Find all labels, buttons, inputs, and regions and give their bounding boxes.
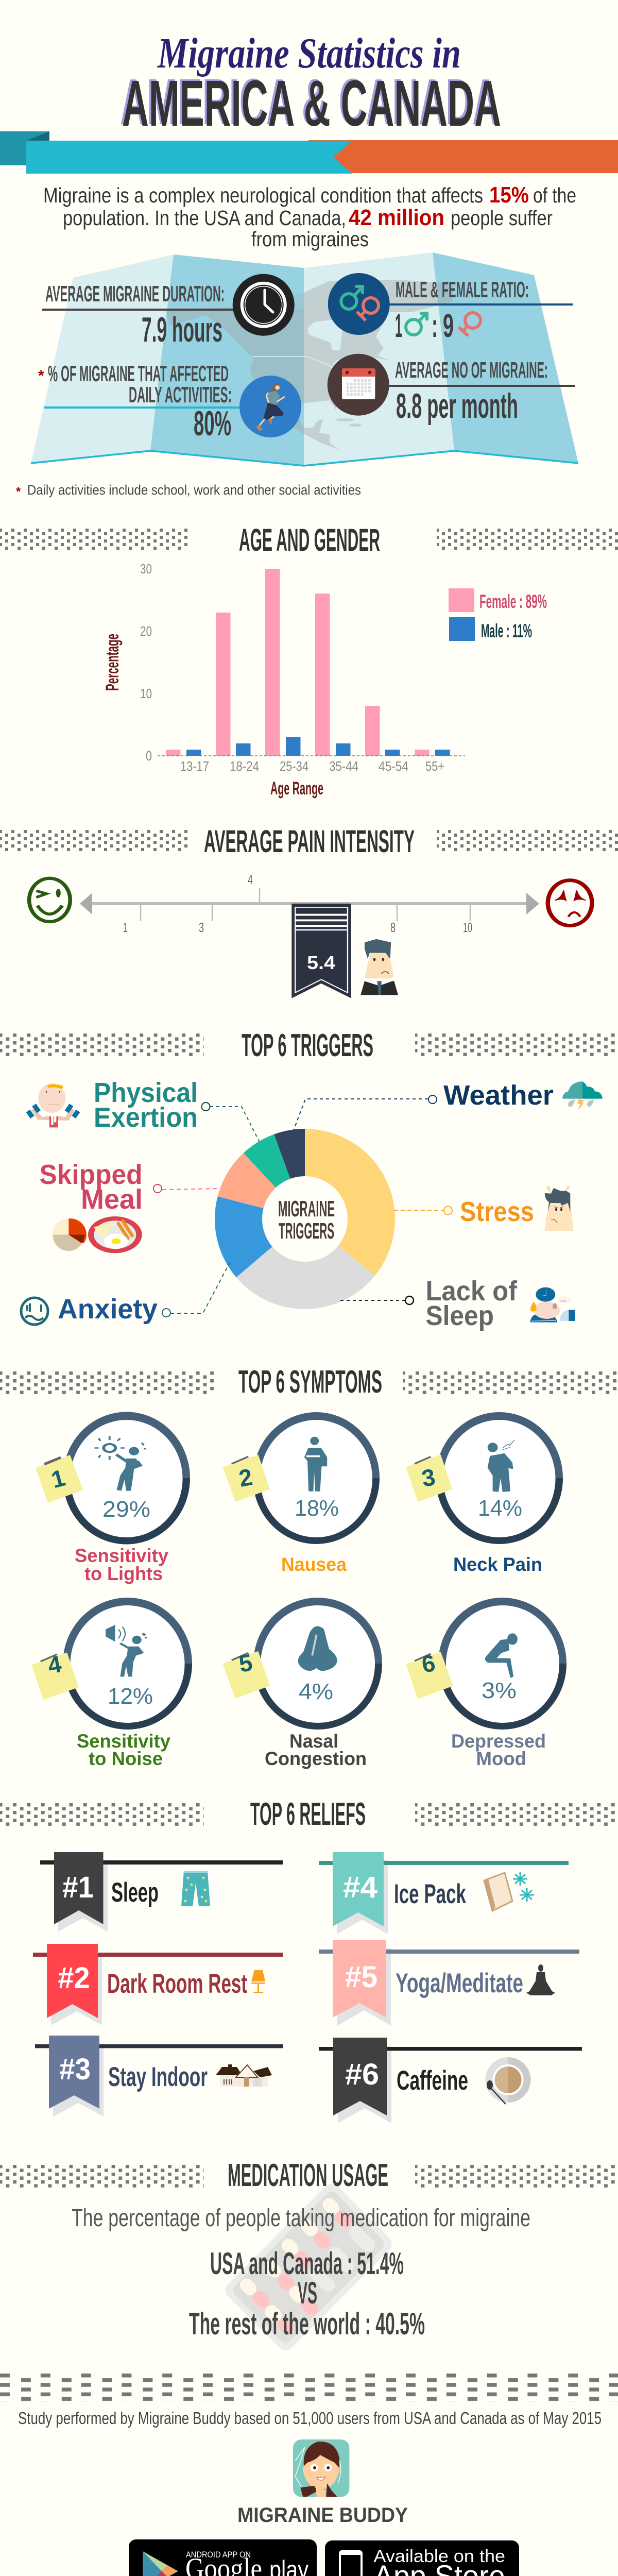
symptom 5: nasal congestion: Congestion bbox=[265, 1748, 367, 1769]
icon: calendar bbox=[328, 354, 389, 416]
symptom 1: sensitivity to lights: to Lights bbox=[84, 1563, 163, 1584]
symptom 4: sensitivity to noise: 12% bbox=[108, 1684, 153, 1709]
icon: lamp bbox=[251, 1970, 265, 1993]
section heading: symptoms: TOP 6 SYMPTOMS bbox=[238, 1364, 382, 1400]
button: app store: Available on the bbox=[374, 2547, 505, 2566]
bar chart: 45-54 bbox=[379, 758, 408, 774]
icon: happy face bbox=[29, 878, 70, 922]
relief 1: sleep bbox=[40, 1852, 283, 1931]
symptom 1: sensitivity to lights bbox=[36, 1412, 190, 1584]
stat: average duration: 7.9 hours bbox=[142, 310, 222, 349]
label: anxiety: Anxiety bbox=[58, 1294, 158, 1325]
pain scale arrow: 4 bbox=[248, 872, 253, 887]
section heading: reliefs bbox=[0, 1797, 618, 1832]
bar chart: 20 bbox=[140, 623, 152, 639]
button: google play bbox=[129, 2539, 317, 2576]
stat: daily activities bbox=[38, 361, 241, 443]
relief 1: sleep: Sleep bbox=[111, 1877, 159, 1908]
symptom 5: nasal congestion bbox=[222, 1598, 382, 1769]
bar chart bbox=[102, 561, 465, 799]
label: physical exertion: Exertion bbox=[94, 1102, 198, 1133]
symptom 5: nasal congestion: 4% bbox=[299, 1679, 333, 1704]
label: skipped meal: Skipped bbox=[39, 1159, 142, 1190]
section heading: age and gender bbox=[0, 522, 618, 557]
intro text: people suffer bbox=[451, 206, 553, 230]
icon: clock and plate bbox=[52, 1216, 142, 1253]
map silhouette bbox=[165, 280, 453, 450]
label: lack of sleep: Lack of bbox=[425, 1276, 518, 1307]
stat: daily activities: 80% bbox=[194, 404, 231, 443]
relief 2: dark room rest bbox=[33, 1944, 283, 2025]
bar chart: 0 bbox=[146, 748, 152, 764]
symptom 1: sensitivity to lights: Sensitivity bbox=[75, 1545, 168, 1566]
intro text: 42 million bbox=[349, 205, 444, 230]
symptom 2: nausea: 18% bbox=[295, 1496, 339, 1521]
score ribbon bbox=[291, 904, 351, 998]
footnote: Daily activities include school, work and other social activities bbox=[27, 482, 361, 498]
sticky note 4 bbox=[31, 1652, 79, 1700]
brand name: MIGRAINE BUDDY bbox=[237, 2504, 408, 2527]
intro text: 15% bbox=[489, 182, 529, 208]
symptom 1: sensitivity to lights: 29% bbox=[102, 1497, 150, 1522]
symptom 6: depressed mood: 3% bbox=[482, 1678, 517, 1703]
medication comparison bbox=[189, 2246, 425, 2341]
section heading: medication bbox=[0, 2158, 618, 2193]
label: skipped meal bbox=[39, 1159, 143, 1215]
intro text bbox=[43, 182, 576, 251]
relief 2: dark room rest: Dark Room Rest bbox=[107, 1969, 247, 1999]
stat: gender ratio bbox=[388, 277, 573, 344]
connector: physical exertion bbox=[202, 1103, 260, 1142]
stat: average duration: AVERAGE MIGRAINE DURATION: bbox=[45, 281, 225, 307]
sticky note 3 bbox=[406, 1454, 453, 1502]
section heading: medication: MEDICATION USAGE bbox=[228, 2158, 388, 2193]
bar chart: 18-24 bbox=[230, 758, 259, 774]
donut chart: TRIGGERS bbox=[279, 1218, 334, 1244]
intro text: population. In the USA and Canada, bbox=[63, 206, 346, 230]
symptom 5: nasal congestion: 5 bbox=[237, 1649, 254, 1677]
sticky note 2 bbox=[222, 1454, 270, 1502]
pain scale arrow: 10 bbox=[463, 920, 472, 935]
relief 3: stay indoor: Stay Indoor bbox=[108, 2062, 208, 2092]
icon: gender symbols bbox=[328, 273, 390, 335]
symptom 2: nausea: 2 bbox=[237, 1463, 254, 1492]
connector: anxiety bbox=[162, 1263, 230, 1317]
icon: pajama pants bbox=[181, 1871, 210, 1906]
icon: muscle man bbox=[26, 1083, 80, 1127]
medication comparison: VS bbox=[298, 2276, 317, 2310]
symptom 2: nausea: Nausea bbox=[281, 1554, 347, 1575]
panel: medication usage bbox=[0, 2158, 618, 2354]
stat: average number bbox=[388, 358, 575, 426]
label: lack of sleep: Sleep bbox=[425, 1300, 494, 1331]
icon: coffee cup bbox=[485, 2057, 530, 2104]
symptom 6: depressed mood: 6 bbox=[420, 1649, 437, 1678]
relief 4: ice pack: Ice Pack bbox=[394, 1879, 466, 1909]
panel: folded map with key stats bbox=[31, 252, 578, 466]
relief 4: ice pack: #4 bbox=[343, 1871, 377, 1904]
connector: lack of sleep bbox=[340, 1296, 414, 1304]
icon: storm cloud bbox=[562, 1081, 603, 1110]
panel: top 6 triggers bbox=[0, 1028, 618, 1331]
stat: daily activities: * bbox=[38, 367, 44, 384]
relief 1: sleep: #1 bbox=[62, 1871, 94, 1904]
connector: skipped meal bbox=[153, 1184, 220, 1193]
relief 6: caffeine: Caffeine bbox=[397, 2065, 468, 2096]
pain scale arrow: 8 bbox=[390, 920, 396, 935]
bar chart: 55+ bbox=[425, 758, 444, 774]
relief 5: yoga bbox=[319, 1940, 579, 2026]
panel: top 6 symptoms bbox=[0, 1364, 618, 1769]
sticky note 1 bbox=[36, 1455, 83, 1503]
label: physical exertion: Physical bbox=[94, 1077, 198, 1108]
icon: sad face bbox=[548, 880, 592, 926]
medication comparison: USA and Canada : 51.4% bbox=[210, 2246, 404, 2281]
icon: house bbox=[216, 2064, 272, 2087]
label: weather: Weather bbox=[443, 1080, 554, 1111]
icon: migraine buddy logo bbox=[293, 2439, 349, 2497]
icon: frowning man bbox=[360, 939, 398, 995]
title bbox=[120, 29, 501, 140]
bar chart: 35-44 bbox=[329, 758, 358, 774]
icon: clock bbox=[233, 274, 295, 336]
icon: ice pack bag bbox=[484, 1872, 534, 1911]
medication comparison: The rest of the world : 40.5% bbox=[189, 2307, 425, 2341]
label: stress: Stress bbox=[460, 1196, 534, 1227]
bar chart: 13-17 bbox=[180, 758, 209, 774]
section heading: triggers: TOP 6 TRIGGERS bbox=[242, 1028, 373, 1063]
symptom 6: depressed mood: Mood bbox=[476, 1748, 526, 1769]
bar chart: Percentage bbox=[102, 634, 123, 691]
label: physical exertion bbox=[94, 1077, 198, 1133]
relief 5: yoga: #5 bbox=[345, 1960, 377, 1994]
symptom 4: sensitivity to noise: to Noise bbox=[89, 1748, 163, 1769]
title: Migraine Statistics in bbox=[157, 29, 461, 77]
bar chart: 10 bbox=[140, 686, 152, 701]
label: lack of sleep bbox=[425, 1276, 518, 1331]
panel: top 6 reliefs bbox=[0, 1797, 618, 2123]
relief 5: yoga: Yoga/Meditate bbox=[396, 1968, 523, 1998]
legend bbox=[449, 588, 547, 641]
symptom 4: sensitivity to noise bbox=[31, 1598, 192, 1769]
connector: weather bbox=[294, 1095, 437, 1130]
section heading: triggers bbox=[0, 1028, 618, 1063]
icon: runner bbox=[239, 376, 301, 437]
relief 6: caffeine bbox=[319, 2038, 582, 2123]
footnote: * bbox=[16, 485, 21, 499]
intro text: of the bbox=[533, 183, 576, 207]
symptom 3: neck pain bbox=[406, 1412, 563, 1575]
section heading: pain intensity: AVERAGE PAIN INTENSITY bbox=[204, 824, 415, 859]
relief 4: ice pack bbox=[319, 1852, 569, 1934]
bar chart: 25-34 bbox=[280, 758, 308, 774]
bar chart: 30 bbox=[140, 561, 152, 577]
icon: sleeping head: z z Z bbox=[560, 1300, 566, 1303]
bar chart: Age Range bbox=[270, 778, 323, 799]
score ribbon: 5.4 bbox=[307, 952, 335, 973]
symptom 4: sensitivity to noise: Sensitivity bbox=[77, 1731, 170, 1752]
stat: gender ratio: 9 bbox=[443, 307, 454, 344]
stat: gender ratio: 1 bbox=[395, 307, 402, 344]
symptom 4: sensitivity to noise: 4 bbox=[46, 1650, 64, 1679]
icon: blister pack watermark bbox=[222, 2180, 396, 2354]
ribbon banner bbox=[0, 131, 618, 174]
icon: meditating figure bbox=[526, 1964, 555, 1995]
panel: age and gender bbox=[0, 522, 618, 799]
donut chart bbox=[215, 1129, 395, 1309]
pain scale arrow bbox=[80, 872, 539, 935]
stat: daily activities: % OF MIGRAINE THAT AFFECTED bbox=[48, 361, 229, 386]
symptom 2: nausea bbox=[222, 1412, 380, 1575]
pain scale arrow: 3 bbox=[199, 920, 204, 935]
intro text: from migraines bbox=[251, 227, 369, 251]
legend: Female : 89% bbox=[479, 591, 547, 612]
relief 3: stay indoor bbox=[35, 2036, 283, 2116]
sticky note 1: 1 bbox=[48, 1464, 68, 1493]
intro text: Migraine is a complex neurological condition that affects bbox=[43, 183, 483, 207]
stat: gender ratio: : bbox=[432, 307, 438, 344]
icon: stressed head bbox=[544, 1185, 574, 1231]
section heading: age and gender: AGE AND GENDER bbox=[239, 522, 380, 557]
sticky note 6 bbox=[406, 1652, 453, 1699]
section heading: reliefs: TOP 6 RELIEFS bbox=[250, 1797, 366, 1832]
symptom 6: depressed mood bbox=[406, 1598, 566, 1769]
label: skipped meal: Meal bbox=[81, 1184, 143, 1215]
relief 3: stay indoor: #3 bbox=[59, 2053, 91, 2086]
section heading: symptoms bbox=[0, 1364, 618, 1400]
stat: daily activities: DAILY ACTIVITIES: bbox=[129, 382, 232, 408]
symptom 3: neck pain: Neck Pain bbox=[453, 1554, 542, 1575]
symptom 3: neck pain: 3 bbox=[420, 1463, 437, 1492]
symptom 6: depressed mood: Depressed bbox=[451, 1731, 546, 1752]
icon: anxious face bbox=[21, 1298, 48, 1325]
sticky note 5 bbox=[222, 1651, 270, 1699]
section heading: pain intensity bbox=[0, 824, 618, 859]
relief 6: caffeine: #6 bbox=[345, 2058, 379, 2091]
icon: sleeping head bbox=[530, 1287, 575, 1323]
button: app store bbox=[325, 2540, 519, 2576]
relief 2: dark room rest: #2 bbox=[58, 1961, 90, 1995]
symptom 3: neck pain: 14% bbox=[478, 1496, 522, 1521]
symptom 5: nasal congestion: Nasal bbox=[289, 1731, 338, 1752]
donut chart: MIGRAINE bbox=[278, 1196, 335, 1222]
connector: stress bbox=[394, 1207, 452, 1215]
panel: average pain intensity bbox=[0, 824, 618, 998]
stat: average duration bbox=[42, 281, 234, 349]
legend: Male : 11% bbox=[481, 620, 532, 641]
pain scale arrow: 1 bbox=[123, 920, 127, 935]
button: google play: ANDROID APP ON bbox=[186, 2550, 251, 2560]
